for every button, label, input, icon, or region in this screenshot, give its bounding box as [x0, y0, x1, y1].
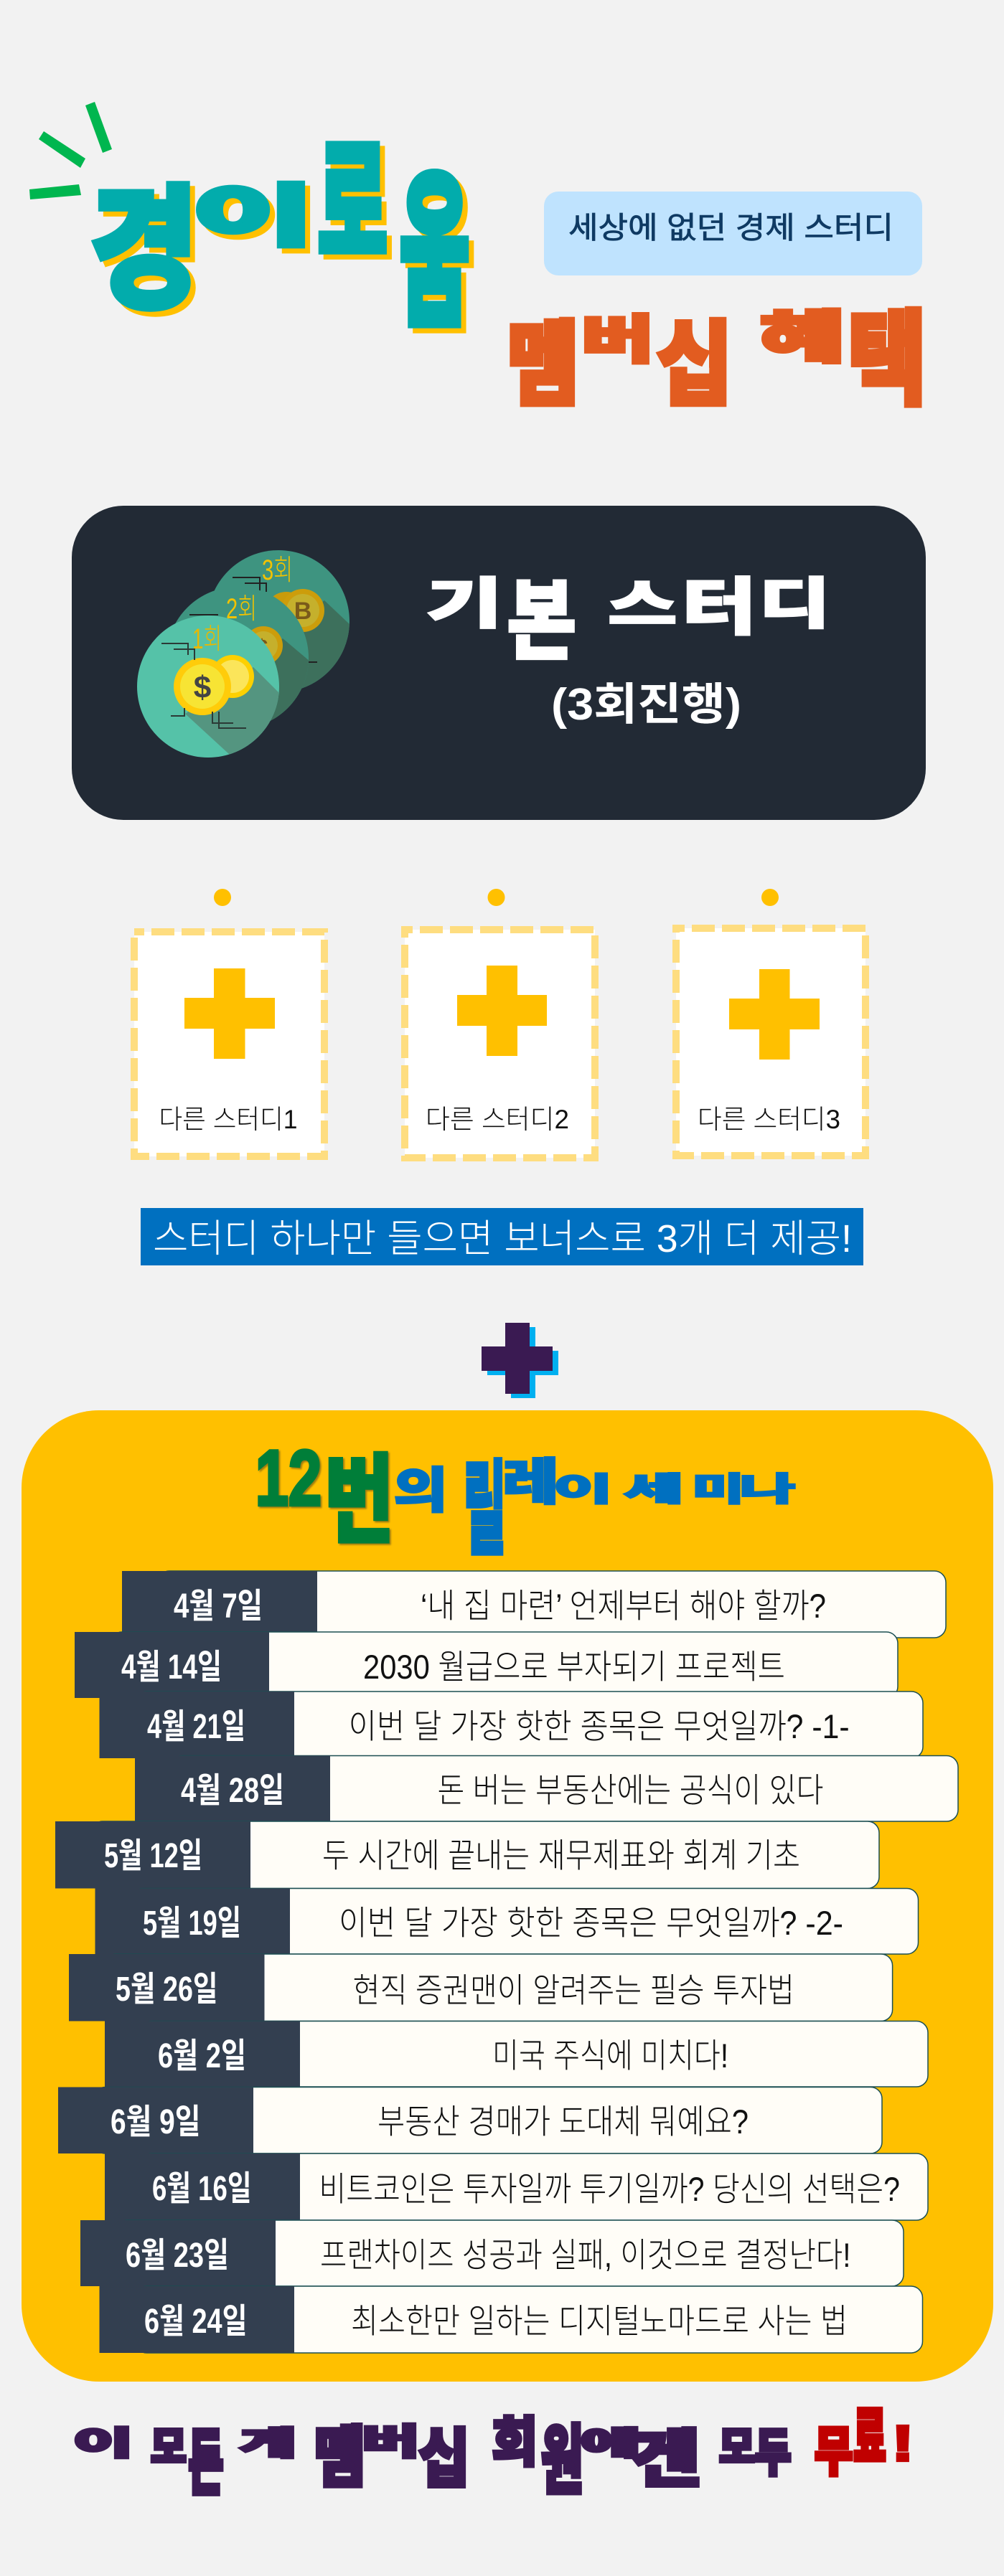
heading: 12번	[255, 1434, 394, 1554]
text: all free for members: 에	[580, 2425, 641, 2462]
text: free	[815, 2402, 914, 2482]
row: 6월 2일	[105, 2021, 928, 2087]
text: all free for members: 버	[362, 2422, 420, 2463]
row: 5월 12일	[55, 1821, 879, 1888]
icon: session 3 coin: 3회	[262, 555, 293, 586]
panel: relay seminar	[22, 1410, 993, 2382]
row: 6월 9일	[58, 2087, 882, 2153]
heading: 기본 스터디: 기	[426, 573, 502, 635]
row: 4월 14일: 4월 14일	[121, 1648, 222, 1686]
heading: 의 릴레이 세미나: 레	[502, 1455, 559, 1510]
text: all free for members: 모	[151, 2424, 187, 2471]
row: 4월 7일: ‘내 집 마련’ 언제부터 해야 할까?	[421, 1587, 826, 1625]
row: 5월 19일: 이번 달 가장 핫한 종목은 무엇일까? -2-	[339, 1904, 843, 1942]
card: study 1	[134, 932, 324, 1156]
card: study 1: 다른 스터디1	[159, 1105, 297, 1134]
row: 6월 24일: 6월 24일	[144, 2303, 247, 2341]
text: all free for members: 든	[188, 2424, 224, 2504]
logo: 경이로움: 이	[191, 178, 315, 255]
text: all free for members: 멤	[314, 2421, 366, 2496]
icon: session 3 coin: B	[294, 598, 311, 625]
row: 6월 2일: 미국 주식에 미치다!	[492, 2037, 728, 2075]
row: 5월 12일: 두 시간에 끝내는 재무제표와 회계 기초	[322, 1836, 800, 1874]
heading: 의 릴레이 세미나: 릴	[463, 1452, 507, 1567]
heading: 기본 스터디	[426, 573, 830, 671]
banner: bonus studies: 스터디 하나만 들으면 보너스로 3개 더 제공!	[153, 1217, 852, 1260]
row: 4월 7일	[122, 1571, 946, 1638]
row: 4월 21일: 이번 달 가장 핫한 종목은 무엇일까? -1-	[349, 1707, 850, 1745]
row: 5월 19일	[95, 1888, 919, 1954]
row: 5월 12일: 5월 12일	[104, 1837, 202, 1875]
row: 6월 16일: 6월 16일	[152, 2170, 251, 2208]
icon: session 2 coin: 2회	[226, 593, 257, 625]
text: all free for members: 게	[239, 2425, 296, 2462]
text: free: !	[892, 2415, 914, 2472]
subtitle badge	[544, 192, 922, 275]
row: 6월 23일: 6월 23일	[126, 2237, 229, 2275]
heading: 기본 스터디: 본	[507, 573, 576, 671]
text: all free for members: 십	[418, 2424, 470, 2495]
heading: 12번: 12	[255, 1434, 322, 1522]
subtitle badge: 세상에 없던 경제 스터디	[568, 211, 893, 245]
card: study 2	[405, 930, 595, 1158]
heading: 의 릴레이 세미나: 이	[553, 1472, 613, 1508]
row: 4월 21일	[99, 1692, 923, 1758]
row: 6월 9일: 부동산 경매가 도대체 뭐예요?	[377, 2103, 749, 2141]
row: 6월 24일: 최소한만 일하는 디지털노마드로 사는 법	[351, 2302, 848, 2340]
icon: session 1 coin: $	[194, 670, 211, 705]
heading: 멤버십 혜택: 택	[848, 303, 926, 418]
row: 4월 28일	[135, 1756, 958, 1821]
heading: 기본 스터디: 스	[608, 577, 677, 636]
row: 6월 23일: 프랜차이즈 성공과 실패, 이것으로 결정난다!	[320, 2236, 851, 2274]
card: study 3	[676, 928, 865, 1156]
heading: 멤버십 혜택: 혜	[760, 306, 845, 369]
icon: green spark strokes	[29, 102, 112, 199]
footer heading	[73, 2402, 914, 2504]
row: 5월 26일: 현직 증권맨이 알려주는 필승 투자법	[353, 1971, 794, 2009]
row: 6월 16일	[105, 2153, 928, 2220]
icon: big plus	[482, 1323, 558, 1398]
row: 4월 14일	[75, 1632, 898, 1698]
card: study 3: 다른 스터디3	[698, 1105, 840, 1134]
text: all free for members: 두	[755, 2424, 792, 2482]
text: free: 료	[853, 2402, 886, 2474]
heading: 12번: 번	[324, 1447, 394, 1554]
row: 4월 7일: 4월 7일	[174, 1587, 263, 1626]
icon: session 2 coin: $	[256, 636, 268, 659]
panel: basic study	[72, 506, 926, 820]
heading: 의 릴레이 세미나	[394, 1452, 796, 1567]
row: 4월 14일: 2030 월급으로 부자되기 프로젝트	[363, 1648, 785, 1686]
heading: 기본 스터디: 터	[682, 574, 756, 643]
logo: 경이로움	[90, 128, 470, 346]
heading: 의 릴레이 세미나: 나	[739, 1471, 796, 1508]
text: all free for members: 겐	[632, 2424, 701, 2495]
heading: 의 릴레이 세미나: 세	[623, 1471, 684, 1508]
heading: 멤버십 혜택: 버	[581, 311, 654, 369]
icon: session 1 coin	[137, 615, 281, 760]
row: 6월 2일: 6월 2일	[158, 2037, 246, 2075]
logo: 경이로움: 로	[317, 128, 388, 281]
icon: orange dots	[214, 889, 779, 906]
row: 5월 26일: 5월 26일	[116, 1971, 218, 2009]
heading: 기본 스터디: 디	[759, 573, 830, 635]
text: all free for members: 이	[73, 2425, 133, 2462]
icon: session 1 coin: 1회	[192, 623, 222, 655]
row: 5월 19일: 5월 19일	[143, 1905, 241, 1943]
text: 3 sessions: (3회진행)	[551, 680, 741, 730]
text: all free for members: 모	[719, 2424, 755, 2471]
row: 6월 16일: 비트코인은 투자일까 투기일까? 당신의 선택은?	[319, 2170, 900, 2208]
row: 4월 21일: 4월 21일	[147, 1708, 245, 1746]
logo: 경이로움: 움	[399, 161, 470, 346]
text: all free for members: 회	[492, 2413, 538, 2473]
row: 6월 9일: 6월 9일	[111, 2103, 201, 2141]
logo: 경이로움: 경	[90, 176, 199, 326]
heading: 멤버십 혜택: 십	[657, 313, 733, 416]
row: 6월 23일	[80, 2220, 904, 2286]
text: all free for members: 원	[541, 2419, 583, 2504]
icon: session 3 coin	[214, 550, 349, 689]
row: 6월 24일	[99, 2286, 923, 2353]
card: study 2: 다른 스터디2	[426, 1105, 569, 1134]
icon: session 2 coin	[175, 590, 309, 721]
heading: 멤버십 혜택: 멤	[507, 314, 579, 417]
text: free: 무	[815, 2423, 853, 2482]
text: all free for members	[73, 2413, 792, 2504]
heading: 의 릴레이 세미나: 의	[394, 1463, 448, 1518]
row: 4월 28일: 4월 28일	[181, 1772, 284, 1810]
heading: 의 릴레이 세미나: 미	[692, 1471, 745, 1508]
row: 5월 26일	[69, 1954, 893, 2021]
heading: 멤버십 혜택	[507, 303, 926, 418]
row: 4월 28일: 돈 버는 부동산에는 공식이 있다	[438, 1771, 824, 1809]
